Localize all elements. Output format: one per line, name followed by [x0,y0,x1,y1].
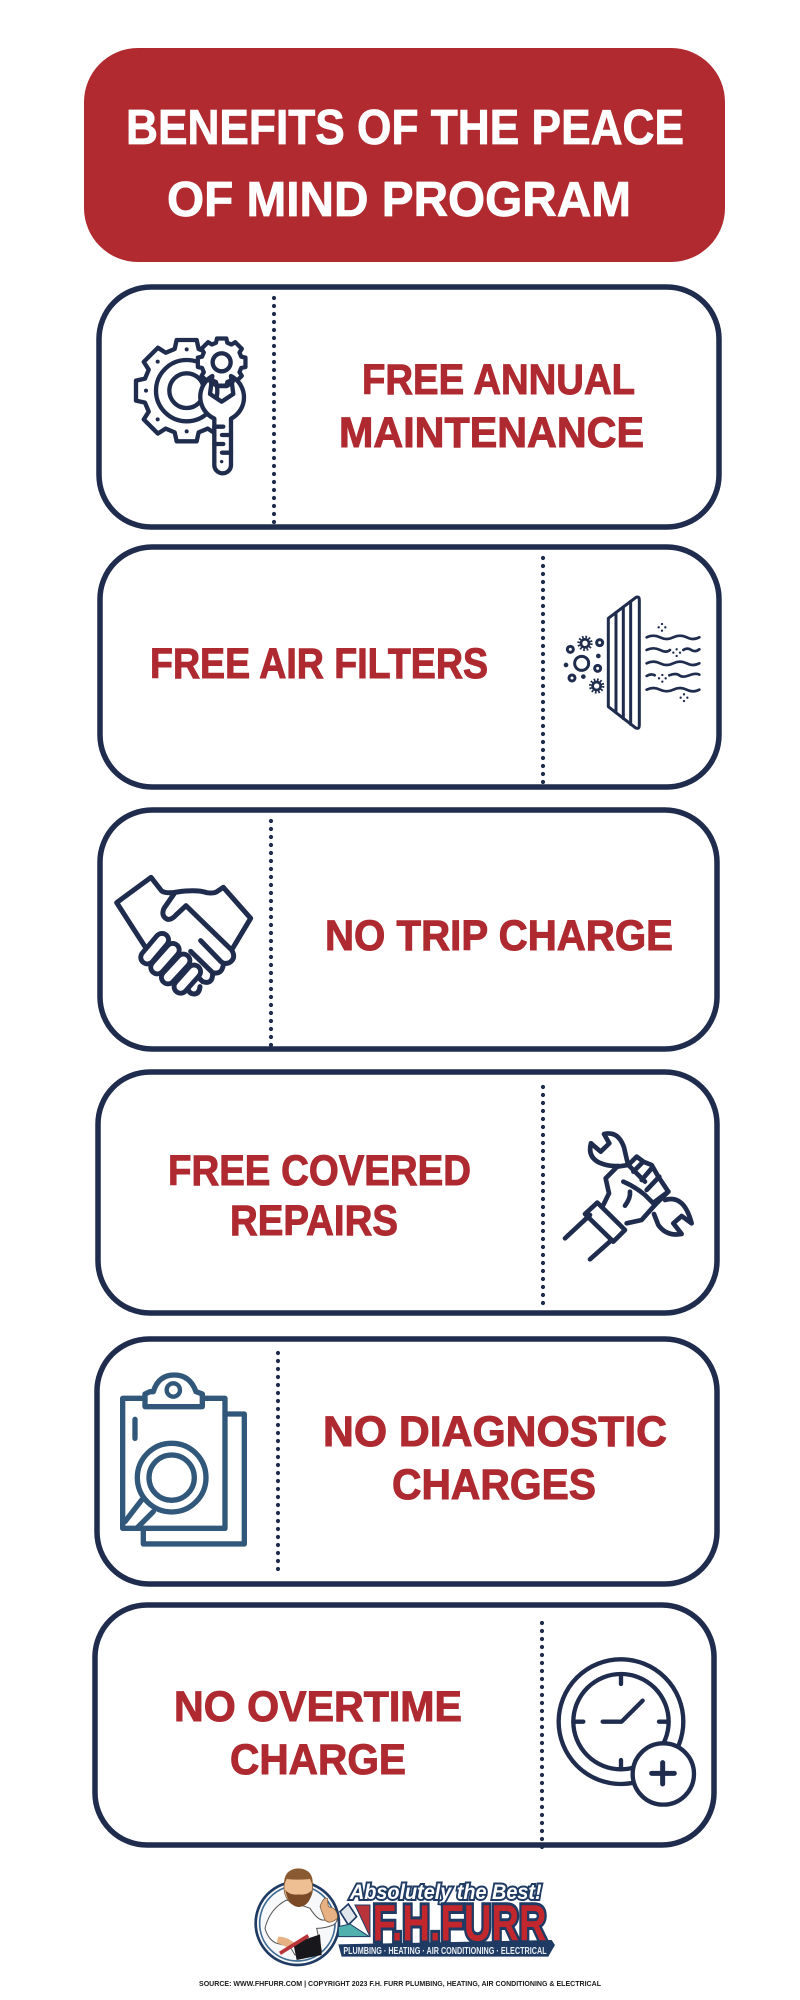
panel: free covered repairs [98,1072,717,1313]
label: CHARGE [230,1736,406,1784]
company name: F.H.FURR [373,1895,547,1952]
label [323,1408,667,1509]
house mark [338,1904,370,1937]
label: REPAIRS [230,1197,398,1245]
panel: free air filters [100,547,719,787]
title banner: BENEFITS OF THE PEACE [126,101,684,155]
icon: clipboard and magnifier [123,1375,244,1544]
label: CHARGES [392,1461,596,1509]
label: MAINTENANCE [339,409,644,457]
label: NO DIAGNOSTIC [323,1408,667,1456]
panel: free annual maintenance [99,287,719,527]
label: FREE COVERED [168,1147,471,1195]
icon: clock with plus [559,1659,694,1805]
label: FREE AIR FILTERS [150,640,488,688]
services band backing [338,1940,555,1957]
source line: SOURCE: WWW.FHFURR.COM | COPYRIGHT 2023 F.H. FURR PLUMBING, HEATING, AIR CONDITIONING & ELECTRICAL [199,1981,602,1988]
logo: F.H. Furr [256,1868,555,1965]
label: NO TRIP CHARGE [325,912,673,960]
label: FREE ANNUAL [362,356,635,404]
label: NO OVERTIME [174,1683,462,1731]
icon: hand holding wrench [565,1133,692,1259]
title banner [84,48,725,262]
title banner: OF MIND PROGRAM [167,173,631,227]
label [174,1683,462,1784]
panel: no overtime charge [95,1605,714,1848]
icon: handshake [117,877,251,994]
panel: no diagnostic charges [97,1339,717,1584]
tagline: Absolutely the Best! [349,1880,542,1904]
icon: air filter [566,597,699,728]
label [339,356,644,457]
icon: gears and wrench [136,339,245,473]
services band: PLUMBING · HEATING · AIR CONDITIONING · ELECTRICAL [343,1946,547,1957]
mascot badge [256,1868,339,1965]
panel: no trip charge [100,810,717,1049]
label [168,1147,471,1245]
